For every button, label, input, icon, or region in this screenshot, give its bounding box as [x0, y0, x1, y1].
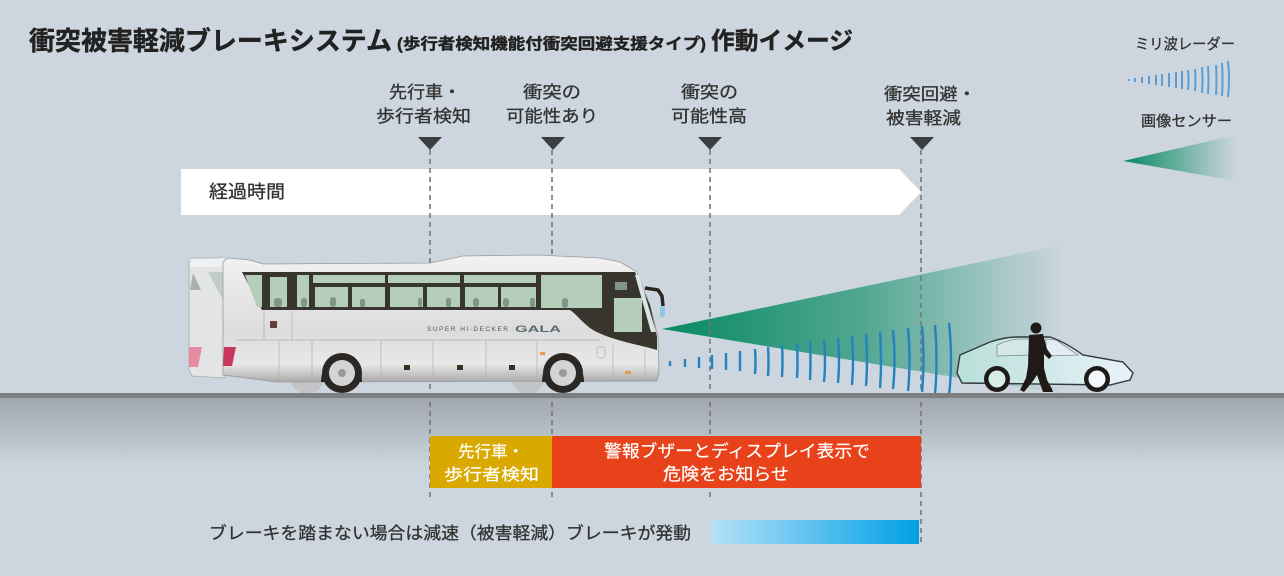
legend: image sensor: 画像センサー — [1141, 113, 1232, 130]
bus — [223, 255, 665, 393]
event label: collision avoidance and mitigation — [884, 85, 976, 128]
image sensor beam — [662, 244, 1066, 394]
radar waves — [670, 323, 951, 395]
title — [29, 26, 853, 56]
passenger windows — [245, 275, 656, 332]
bus lettering — [427, 324, 562, 334]
ground shadow — [0, 398, 1284, 468]
event label: vehicle and pedestrian detection: 先行車・ — [389, 83, 461, 102]
event label: collision avoidance and mitigation: 被害軽減 — [886, 109, 961, 128]
title: 作動イメージ — [711, 28, 853, 55]
car — [957, 337, 1133, 392]
bar: detection: 歩行者検知 — [444, 466, 539, 484]
bus lettering: SUPER HI-DECKER — [427, 326, 508, 333]
window band — [242, 272, 657, 350]
front wheel — [542, 353, 584, 393]
event label: collision highly possible: 衝突の — [681, 83, 738, 102]
bar: detection: 先行車・ — [458, 443, 524, 461]
title: (歩行者検知機能付衝突回避支援タイプ) — [397, 34, 706, 53]
mirror — [645, 288, 663, 306]
elapsed time arrow — [181, 169, 921, 215]
seat silhouettes — [274, 297, 568, 308]
road line — [0, 393, 1284, 398]
bus lettering: GALA — [515, 324, 562, 334]
braking caption: ブレーキを踏まない場合は減速（被害軽減）ブレーキが発動 — [209, 523, 691, 543]
event label: collision possible: 衝突の — [523, 83, 581, 102]
bar: warning buzzer and display — [552, 436, 921, 488]
rear wheel — [321, 353, 362, 393]
bar: warning buzzer and display: 危険をお知らせ — [663, 465, 789, 484]
pedestrian — [1020, 322, 1053, 392]
event label: vehicle and pedestrian detection: 歩行者検知 — [376, 107, 471, 126]
body panel lines — [236, 311, 645, 380]
event label: collision possible: 可能性あり — [506, 107, 598, 126]
ghost bus rear — [189, 258, 545, 394]
warning stage bars — [430, 436, 921, 488]
timeline dashed guides — [430, 150, 921, 545]
event label: vehicle and pedestrian detection — [376, 83, 471, 126]
event label: collision highly possible: 可能性高 — [671, 107, 747, 126]
timeline markers — [418, 137, 934, 150]
bar: detection — [430, 436, 552, 488]
title: 衝突被害軽減ブレーキシステム — [29, 26, 392, 56]
event label: collision possible — [506, 83, 598, 126]
legend: millimeter-wave radar — [1129, 36, 1235, 97]
rear badge — [270, 321, 277, 328]
legend: millimeter-wave radar: ミリ波レーダー — [1135, 36, 1235, 53]
event label: collision highly possible — [671, 83, 747, 126]
bar: warning buzzer and display: 警報ブザーとディスプレイ表示で — [604, 441, 870, 461]
braking bar — [711, 520, 919, 544]
legend: image sensor — [1123, 113, 1236, 181]
side markers — [404, 352, 631, 374]
tail light — [223, 347, 236, 366]
bus body — [223, 255, 659, 382]
elapsed time arrow: 経過時間 — [209, 182, 285, 202]
event label: collision avoidance and mitigation: 衝突回避・ — [884, 85, 976, 104]
